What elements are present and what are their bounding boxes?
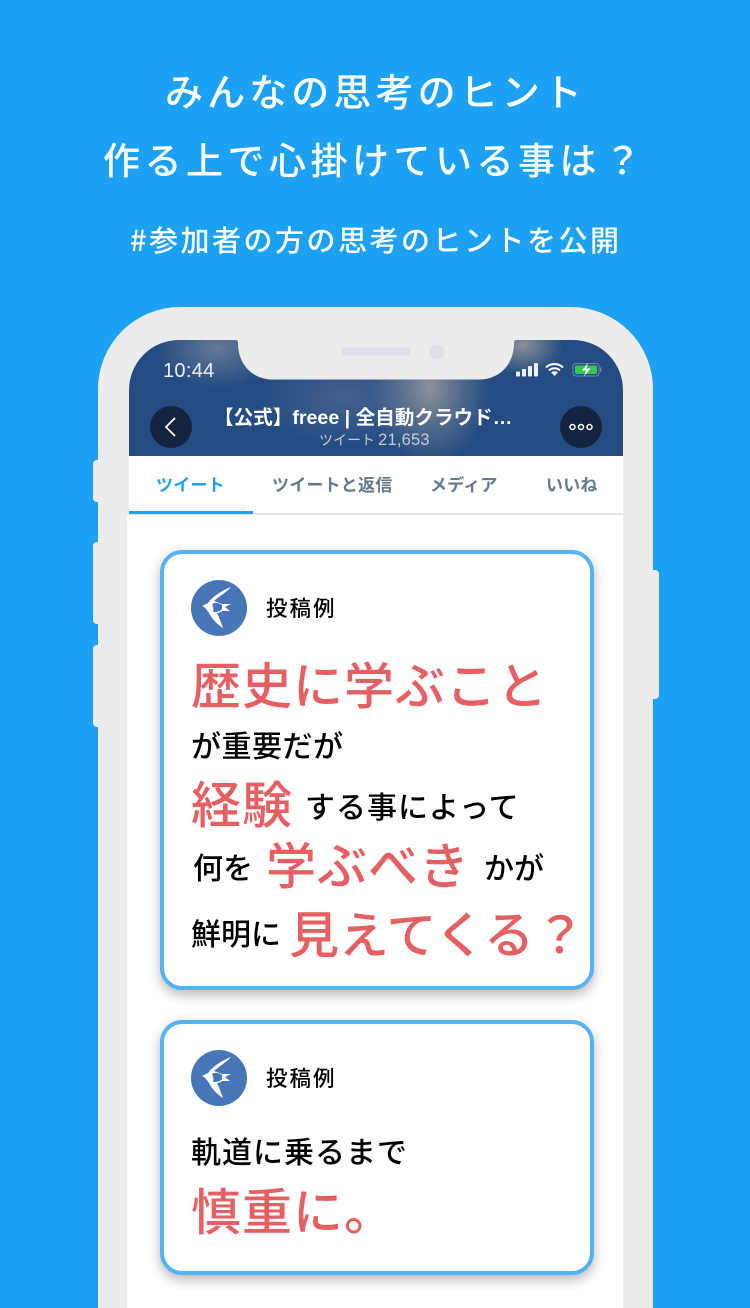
screen body <box>127 515 623 1308</box>
phone side buttons <box>93 460 659 727</box>
tab: tweets: ツイート <box>156 471 225 496</box>
status time: 10:44 <box>163 360 215 382</box>
title: 作る上で心掛けている事は？ <box>103 131 646 185</box>
quote line 4: 何を <box>193 844 253 888</box>
card 1: かが <box>484 844 544 888</box>
card 1: する事によって <box>305 783 520 827</box>
quote line 3: 経験 <box>191 766 293 838</box>
back button <box>150 406 192 448</box>
title: みんなの思考のヒント <box>165 62 586 117</box>
quote line 5: 鮮明に <box>191 910 281 954</box>
bird avatar <box>191 1050 247 1106</box>
tab: likes: いいね <box>546 471 598 496</box>
tab bar <box>129 456 623 515</box>
subtitle: #参加者の方の思考のヒントを公開 <box>130 218 622 260</box>
card 1: 学ぶべき <box>266 827 470 899</box>
tweet count: ツイート 21,653 <box>319 430 430 450</box>
quote line 2: 慎重に。 <box>191 1173 395 1245</box>
card 2 <box>160 1020 594 1275</box>
quote line 1: 歴史に学ぶこと <box>191 647 548 719</box>
account name: 【公式】freee | 全自動クラウド… <box>214 407 512 429</box>
tab: tweets and replies: ツイートと返信 <box>272 471 392 496</box>
post label: 投稿例 <box>266 592 337 623</box>
post label: 投稿例 <box>266 1062 337 1093</box>
title <box>103 62 646 185</box>
status icons <box>516 362 602 376</box>
phone body <box>98 307 653 1308</box>
phone <box>93 307 659 1308</box>
tab: media: メディア <box>430 471 498 496</box>
quote line 1: 軌道に乗るまで <box>191 1128 408 1172</box>
active tab underline <box>129 511 253 514</box>
notch <box>236 340 516 380</box>
card 1: 見えてくる？ <box>289 896 585 968</box>
more button <box>560 406 602 448</box>
screen header <box>129 340 623 456</box>
quote line 2: が重要だが <box>191 722 344 766</box>
card 1 <box>160 550 594 990</box>
bird avatar <box>191 580 247 636</box>
